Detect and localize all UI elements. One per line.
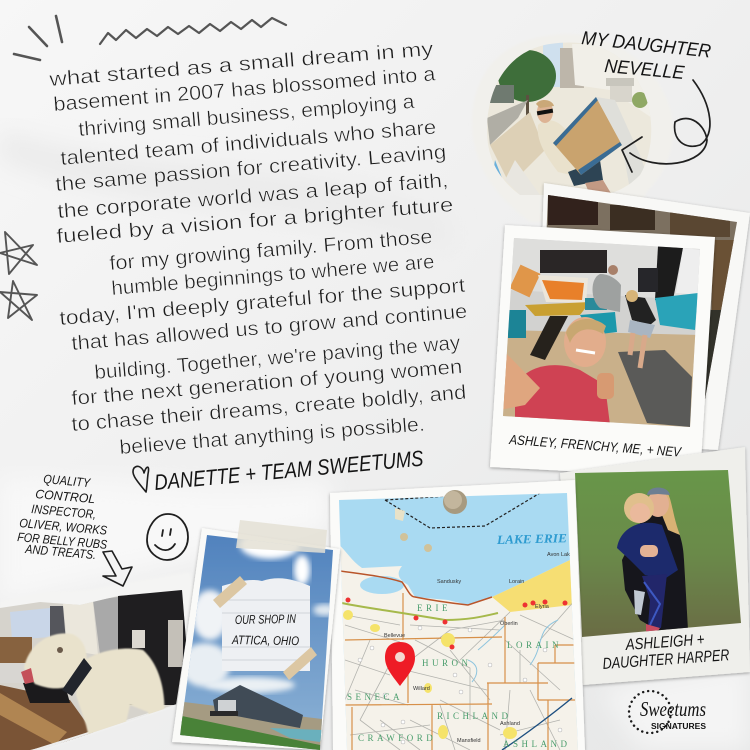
note card: our shop in Attica, Ohio: OUR SHOP IN <box>235 612 297 627</box>
county lines and highways <box>345 593 575 750</box>
tree <box>498 50 556 102</box>
map land <box>330 542 585 750</box>
polaroid: road map of Ohio: Sandusky <box>437 579 461 585</box>
quality control caption: INSPECTOR, <box>31 502 97 522</box>
quality control caption: CONTROL <box>35 487 96 506</box>
child <box>624 493 654 523</box>
polaroid: road map of Ohio: Bellevue <box>384 633 405 639</box>
icon: pushpin <box>443 490 467 514</box>
box <box>553 97 622 175</box>
signature with heart: DANETTE + TEAM SWEETUMS <box>153 446 425 495</box>
photo: Oliver the dog on torn paper <box>0 590 186 750</box>
doodle: stars <box>0 232 37 320</box>
main story text: building. Together, we're paving the way <box>94 332 461 384</box>
icon: smiley <box>147 514 188 560</box>
main story text: talented team of individuals who share <box>60 117 437 170</box>
tape on shop photo <box>236 520 327 553</box>
polaroid: road map of Ohio: SENECA <box>347 692 403 702</box>
mother <box>622 509 688 632</box>
polaroid: road map of Ohio: Mansfield <box>457 738 481 744</box>
polaroid: road map of Ohio: ERIE <box>417 603 451 613</box>
main story text: for the next generation of young women <box>71 356 463 410</box>
polaroid: road map of Ohio: Elyria <box>535 604 550 610</box>
sky and storefront <box>543 42 563 87</box>
quality control caption: QUALITY <box>43 472 92 490</box>
caption: my daughter Nevelle <box>580 28 712 84</box>
polaroid: road map of Ohio: CRAWFORD <box>358 733 436 743</box>
road and pavement <box>487 100 528 145</box>
main story text: believe that anything is possible. <box>119 414 425 459</box>
main story text: basement in 2007 has blossomed into a <box>53 63 437 116</box>
arrow: outline arrow pointing at dog <box>103 551 132 586</box>
doodle: zigzag line <box>100 18 286 44</box>
tape strips on note card <box>213 576 317 680</box>
main story text: humble beginnings to where we are <box>111 251 435 300</box>
box bearer <box>538 120 578 176</box>
photo: daughter Nevelle on torn paper <box>487 42 652 195</box>
logo: Sweetums Signatures <box>629 691 707 733</box>
main story text: that has allowed us to grow and continue <box>71 301 468 355</box>
note card: our shop in Attica, Ohio <box>222 578 310 671</box>
polaroid photo: Ashleigh and daughter Harper: ASHLEIGH + <box>624 632 705 654</box>
polaroid: road map of Ohio: Avon Lake <box>547 552 573 558</box>
main story text: what started as a small dream in my <box>47 38 434 91</box>
polaroid: road map of Ohio: Lorain <box>509 579 524 585</box>
polaroid: road map of Ohio: Oberlin <box>500 621 518 627</box>
front polaroid photo: print shop: ASHLEY, FRENCHY, ME, + NEV <box>508 432 683 460</box>
main story text <box>47 38 468 459</box>
polaroid: road map of Ohio: LAKE ERIE <box>496 531 567 547</box>
icon: red map pin <box>385 642 415 686</box>
main story text: the corporate world was a leap of faith, <box>57 170 449 223</box>
main story text: thriving small business, employing a <box>78 91 416 141</box>
arrow: loop pointing at Nevelle <box>622 80 710 172</box>
quality control caption: FOR BELLY RUBS <box>17 530 108 552</box>
polaroid: road map of Ohio: ASHLAND <box>503 739 571 749</box>
polaroid: shop photo <box>172 528 340 750</box>
pale plastic wrap <box>596 97 644 184</box>
polaroid photo: Ashleigh and daughter Harper <box>560 447 750 685</box>
polaroid: road map of Ohio <box>330 480 590 750</box>
quality control caption <box>17 472 108 562</box>
main story text: the same passion for creativity. Leaving <box>55 141 447 196</box>
polaroid: road map of Ohio: LORAIN <box>507 640 562 650</box>
minor roads <box>345 600 575 750</box>
logo: Sweetums Signatures: Sweetums <box>640 697 706 721</box>
main story text: today, I'm deeply grateful for the support <box>59 275 467 330</box>
back polaroid photo <box>530 183 750 450</box>
polaroid: road map of Ohio: RICHLAND <box>437 711 512 721</box>
main story text: for my growing family. From those <box>109 226 433 275</box>
dog <box>24 632 166 734</box>
caption: my daughter Nevelle: MY DAUGHTER <box>580 28 712 63</box>
polaroid: road map of Ohio: Willard <box>413 686 430 692</box>
caption: my daughter Nevelle: NEVELLE <box>604 56 685 84</box>
front polaroid photo: print shop <box>490 225 715 478</box>
main story text: to chase their dreams, create boldly, and <box>71 382 467 436</box>
towns <box>441 633 455 647</box>
polaroid: road map of Ohio: Ashland <box>500 721 520 727</box>
main story text: fueled by a vision for a brighter future <box>56 194 454 248</box>
doodle: burst lines <box>14 16 62 60</box>
quality control caption: AND TREATS. <box>24 542 97 562</box>
logo: Sweetums Signatures: SIGNATURES <box>651 722 707 731</box>
quality control caption: OLIVER, WORKS <box>19 516 108 538</box>
polaroid: road map of Ohio: HURON <box>422 658 472 668</box>
icon: heart <box>133 466 149 492</box>
note card: our shop in Attica, Ohio: ATTICA, OHIO <box>231 633 299 648</box>
